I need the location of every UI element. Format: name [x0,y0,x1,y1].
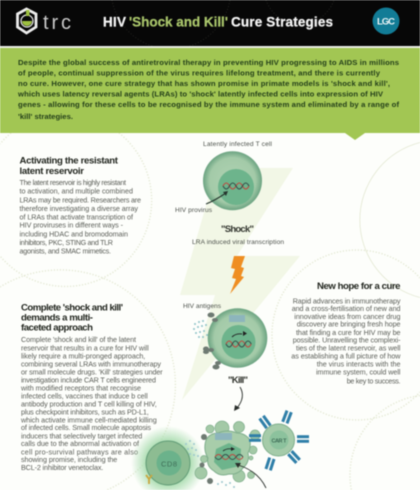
title: 'Shock and Kill' [129,14,228,30]
arrow: kill to dying cell [234,387,242,411]
background lightning bolt [180,168,300,400]
intro panel [0,48,420,140]
text block: complete shock and kill: antibody production and T cell killing of HIV, [21,400,157,409]
dotted background circles [0,133,420,490]
text block: complete shock and kill: or small molecule drugs. 'Kill' strategies under [21,368,163,377]
label: LRA induced viral transcription: LRA induced viral transcription [192,239,284,246]
intro panel: genes - allowing for these cells to be recognised by the immune system and eliminated by a range of [18,100,399,109]
icon: CD8 T cell [131,426,205,490]
text block: complete shock and kill: calls due to the abnormal activation of [21,439,139,448]
text block: complete shock and kill: BCL-2 inhibitor venetoclax. [21,463,103,472]
text block: activating the resistant latent reservoir: to activation, and multiple combined [20,187,133,196]
intro panel: which uses latency reversal agents (LRAs) to 'shock' latently infected cells into expression of HIV [17,90,384,99]
heading: Shock: "Shock" [221,224,254,235]
text block: activating the resistant latent reservoir: therefore investigating a diverse array [20,204,138,213]
intro panel: Despite the global success of antiretroviral therapy in preventing HIV progressing to AIDS in millions [18,58,399,67]
text block: new hope for a cure: Rapid advances in immunotherapy [293,296,401,305]
antigen spikes [203,312,221,370]
text block: new hope for a cure: possible. Unravelling the complexi- [293,336,401,345]
text block: activating the resistant latent reservoir: agonists, and SMAC mimetics. [20,246,111,255]
text block: activating the resistant latent reservoir: including HDAC and bromodomain [20,230,128,239]
text block: complete shock and kill: cell pro-survival pathways are also [21,448,138,457]
title: HIV [103,14,126,30]
intro panel: no cure. However, one cure strategy that has shown promise in primate models is 'shock and kill', [18,79,390,88]
icon: CAR T cell: CAR T [272,438,287,444]
text block: activating the resistant latent reservoir: inhibitors, PKC, STING and TLR [20,238,113,247]
text block: complete shock and kill: Complete 'shock and kill' of the latent [21,335,136,344]
text block: complete shock and kill: reservoir that results in a cure for HIV will [21,344,149,353]
text block: complete shock and kill [20,303,163,472]
text block: complete shock and kill: which activate immune cell-mediated killing [20,416,157,425]
intro panel: of people, continual suppression of the virus requires lifelong treatment, and there is currently [18,69,381,78]
icon: CD8 T cell: CD8 [161,460,177,468]
icon: cell expressing HIV antigens [193,308,267,370]
text block: activating the resistant latent reservoir: Activating the resistant [20,156,119,166]
text block: complete shock and kill: of infected cells. Small molecule apoptosis [21,423,151,432]
label: latently infected T cell: Latently infected T cell [203,141,273,148]
label: HIV antigens: HIV antigens [183,303,222,310]
text block: complete shock and kill: inducers that selectively target infected [21,431,142,440]
logo: LGC [372,8,400,34]
text block: complete shock and kill: likely require a multi-pronged approach, [21,352,145,361]
icon: orange lightning bolt [230,256,245,294]
text block: activating the resistant latent reservoir: HIV proviruses in different ways - [20,221,124,230]
icon: dying infected cell [185,421,266,488]
text block: new hope for a cure: immune system, could well [316,368,401,377]
title: Cure Strategies [231,14,333,30]
text block: new hope for a cure: be key to success. [347,376,400,385]
text block: new hope for a cure: innovative ideas from cancer drug [294,312,400,321]
text block: new hope for a cure: discovery are bringing fresh hope [297,320,400,329]
text block: activating the resistant latent reservoir: The latent reservoir is highly resistant [20,178,126,187]
intro panel: 'kill' strategies. [18,112,73,121]
text block: complete shock and kill: plus checkpoint inhibitors, such as PD-L1, [21,408,149,417]
text block: new hope for a cure: as establishing a full picture of how [291,352,401,361]
text block: new hope for a cure [291,281,401,385]
icon: CAR T cell [249,410,309,471]
text block: complete shock and kill: demands a multi- [21,313,93,324]
text block: complete shock and kill: showing promise, including the [21,455,117,464]
heading: Kill: "Kill" [228,375,248,386]
text block: new hope for a cure: ties of the latent reservoir, as well [296,344,401,353]
logo: trc [18,9,71,34]
text block: activating the resistant latent reservoir: latent reservoir [20,166,84,177]
text block: complete shock and kill: Complete 'shock and kill' [21,303,123,314]
text block: new hope for a cure: that finding a cure for HIV may be [296,328,400,337]
text block: complete shock and kill: faceted approach [21,323,93,334]
text block: complete shock and kill: infected cells, vaccines that induce b cell [21,392,148,401]
label: HIV provirus: HIV provirus [175,207,213,214]
logo: LGC: LGC [377,16,395,28]
text block: new hope for a cure: New hope for a cure [317,281,400,292]
text block: activating the resistant latent reservoir: LRAs may be required. Researchers are [20,195,141,204]
text block: complete shock and kill: combining several LRAs with immunotherapy [21,360,161,369]
text block: activating the resistant latent reservoir: of LRAs that activate transcription of [20,212,133,221]
icon: latently infected T cell [203,151,262,210]
text block: complete shock and kill: investigation include CAR T cells engineered [21,376,156,385]
logo: trc: trc [43,12,71,34]
text block: new hope for a cure: the virus interacts with the [317,360,400,369]
text block: complete shock and kill: with modified receptors that recognise [20,384,141,393]
title [103,14,333,30]
header band [0,0,420,49]
text block: new hope for a cure: and a cross-fertilisation of new and [292,304,400,313]
text block: activating the resistant latent reservoir [20,156,141,255]
